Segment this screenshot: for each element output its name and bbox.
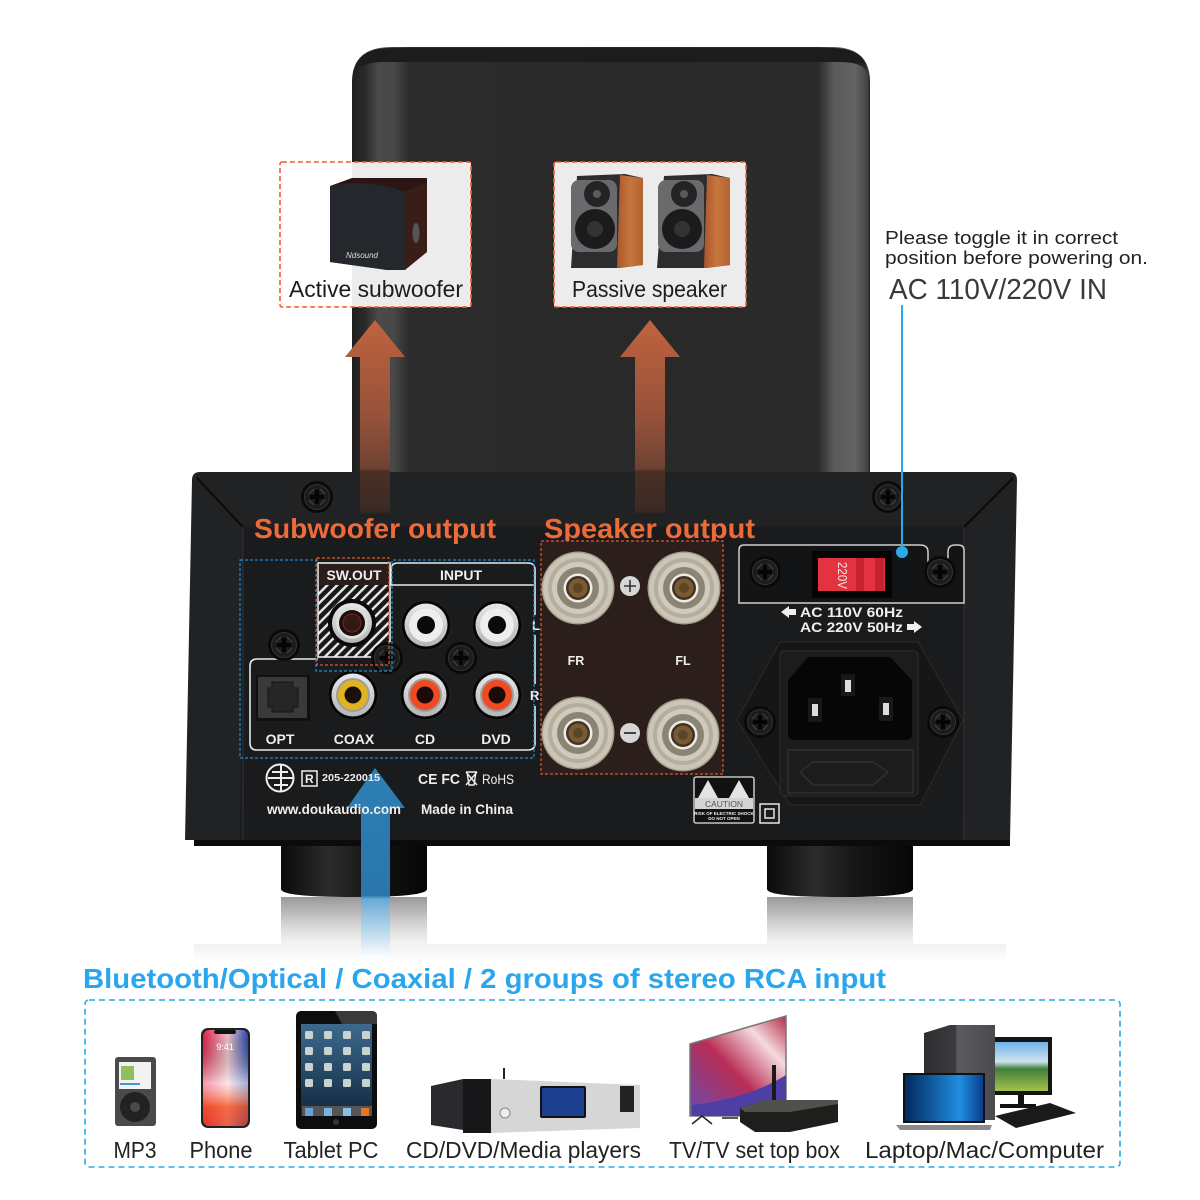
double insulation mark <box>760 804 779 823</box>
FR label: FR <box>568 654 584 668</box>
power inlet <box>737 642 963 805</box>
heading: speaker output: Speaker output <box>544 513 755 544</box>
device: tablet: Tablet PC <box>284 1137 378 1163</box>
voltage labels: AC 110V 60Hz <box>800 604 903 620</box>
chassis top screws <box>301 481 904 513</box>
device: phone <box>190 1028 252 1163</box>
white RCA L jack <box>401 600 451 650</box>
heading: inputs: Bluetooth/Optical / Coaxial / 2 groups of stereo RCA input <box>83 963 886 994</box>
panel: source devices <box>85 1000 1120 1167</box>
input labels <box>266 731 511 747</box>
device: TV and set top box: TV/TV set top box <box>669 1137 840 1163</box>
amplifier chassis <box>185 472 1017 846</box>
device: phone: Phone <box>190 1137 252 1163</box>
icon: speaker left <box>571 174 643 268</box>
voltage labels: AC 220V 50Hz <box>800 619 903 635</box>
laptop <box>903 1073 985 1123</box>
device: computers <box>865 1025 1104 1163</box>
SW.OUT label: SW.OUT <box>326 567 382 583</box>
icon: subwoofer: Ndsound <box>346 251 379 260</box>
device: tablet <box>284 1011 378 1163</box>
optical port <box>256 675 310 721</box>
input labels: COAX <box>334 731 375 747</box>
pins <box>808 674 893 722</box>
red rocker switch <box>818 558 885 591</box>
icon: speaker right <box>657 174 730 268</box>
label: Active subwoofer <box>289 276 463 302</box>
voltage note text: position before powering on. <box>885 247 1148 268</box>
socket <box>788 657 912 740</box>
caution label: RISK OF ELECTRIC SHOCK <box>694 811 754 816</box>
red RCA jack CD <box>400 670 450 720</box>
speaker terminals panel <box>541 541 723 774</box>
arrow: to passive speaker <box>620 320 680 516</box>
voltage labels <box>781 604 922 635</box>
red rocker switch: 220V <box>835 562 850 589</box>
white RCA L jack 2 <box>472 600 522 650</box>
L label: L <box>532 618 540 633</box>
panel: active subwoofer <box>280 162 471 307</box>
foot left <box>281 844 427 897</box>
device: media player <box>406 1068 641 1163</box>
plus badge <box>620 576 640 596</box>
fuse drawer <box>788 750 913 793</box>
icon: TELEC <box>266 764 294 792</box>
input labels: DVD <box>481 731 511 747</box>
blue dashed input zone <box>240 560 534 758</box>
transformer cover <box>352 47 870 480</box>
input labels: OPT <box>266 731 295 747</box>
SW.OUT box <box>318 563 390 657</box>
website: www.doukaudio.com <box>266 802 401 817</box>
icon: R mark: R <box>305 772 314 786</box>
voltage switch panel <box>739 545 964 603</box>
device: phone: 9:41 <box>216 1042 234 1052</box>
panel: passive speaker <box>554 162 746 307</box>
caution label: CAUTION <box>705 799 743 809</box>
FL label: FL <box>675 654 691 668</box>
input section outlines <box>250 563 535 750</box>
input labels: CD <box>415 731 435 747</box>
icon: WEEE bin <box>466 772 477 785</box>
heading: subwoofer output: Subwoofer output <box>254 513 496 544</box>
blue input arrow <box>347 768 405 958</box>
switch housing <box>812 551 892 598</box>
voltage note text <box>885 227 1148 268</box>
minus badge <box>620 723 640 743</box>
device: TV and set top box <box>669 1016 840 1163</box>
monitor <box>994 1037 1052 1095</box>
regulatory marks <box>266 764 514 817</box>
certificate number: 205-220015 <box>322 772 380 784</box>
device: media player: CD/DVD/Media players <box>406 1137 641 1163</box>
red RCA jack DVD <box>472 670 522 720</box>
RoHS: RoHS <box>482 772 514 787</box>
arrow: to active subwoofer <box>345 320 405 516</box>
floor reflection <box>194 897 1006 962</box>
voltage note text: Please toggle it in correct <box>885 227 1118 248</box>
panel screws <box>268 629 477 674</box>
icon: subwoofer <box>330 178 427 270</box>
coaxial yellow jack <box>328 670 378 720</box>
label: Passive speaker <box>572 276 727 302</box>
device: MP3 <box>114 1057 156 1163</box>
orange dashed SW.OUT zone <box>317 558 389 665</box>
device: MP3: MP3 <box>114 1137 156 1163</box>
caution label <box>694 777 754 823</box>
caution label: DO NOT OPEN <box>708 816 740 821</box>
INPUT label: INPUT <box>440 567 482 583</box>
R label: R <box>530 688 540 703</box>
made in China: Made in China <box>421 802 513 817</box>
chassis front panel <box>240 526 964 840</box>
heading: AC voltage: AC 110V/220V IN <box>889 274 1107 306</box>
blue leader line to switch <box>896 305 908 558</box>
foot right <box>767 844 913 897</box>
CE FC: CE FC <box>418 771 460 788</box>
icon: R mark <box>302 771 317 786</box>
keyboard <box>995 1103 1076 1128</box>
device: computers: Laptop/Mac/Computer <box>865 1137 1104 1163</box>
tower <box>924 1025 995 1120</box>
